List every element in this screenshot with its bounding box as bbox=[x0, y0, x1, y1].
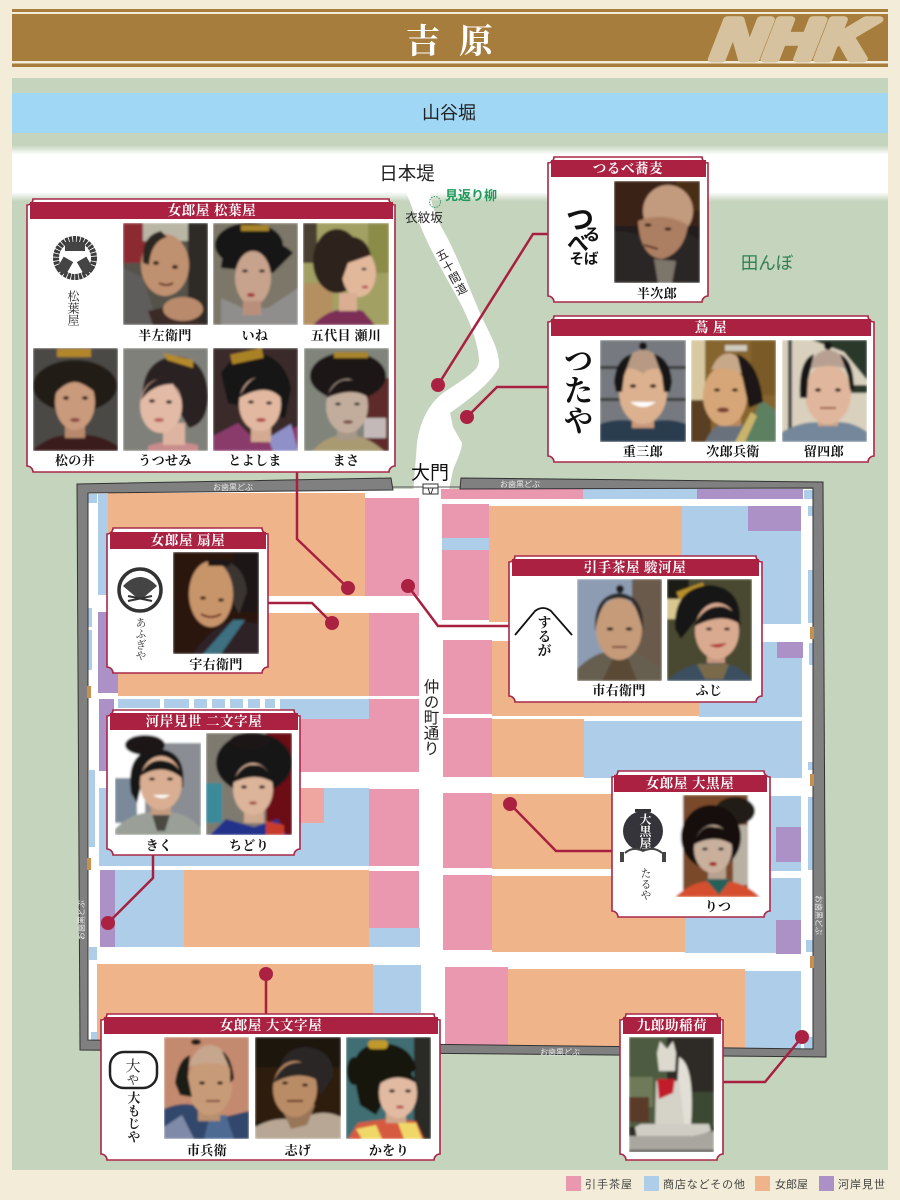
road label: 仲の町通り: 仲の町通り bbox=[422, 678, 439, 756]
panel: 大文字屋 bbox=[101, 1014, 440, 1160]
panel: 扇屋: 女郎屋 扇屋 bbox=[151, 532, 225, 548]
photo: 宇右衛門 bbox=[173, 552, 259, 654]
connector lines bbox=[101, 234, 809, 1082]
name: 留四郎: 留四郎 bbox=[804, 444, 844, 459]
photo: 半左衛門 bbox=[123, 223, 208, 325]
photo: りつ bbox=[675, 795, 760, 897]
photo: 半次郎 bbox=[614, 181, 700, 283]
panel: 大黒屋: 女郎屋 大黒屋 bbox=[646, 775, 734, 791]
panel: 松葉屋 bbox=[27, 199, 395, 472]
main gate: 大門: 大門 bbox=[411, 462, 449, 484]
map labels: 日本堤 bbox=[379, 163, 435, 184]
legend: 商店などその他 bbox=[663, 1178, 745, 1191]
photo: 志げ bbox=[255, 1037, 341, 1139]
icon: つるべそば logo: べ bbox=[567, 231, 589, 256]
photo: ふじ bbox=[667, 579, 752, 681]
map labels bbox=[379, 163, 794, 299]
icon: 扇屋 crest: あふぎや bbox=[134, 617, 146, 661]
icon: つるべそば logo: そば bbox=[570, 251, 599, 268]
photo: 重三郎 bbox=[600, 340, 686, 442]
name: りつ: りつ bbox=[705, 899, 731, 914]
moat wall: お歯黒どぶ: お歯黒どぶ bbox=[213, 482, 253, 492]
title band bbox=[12, 8, 888, 72]
photo: 五代目 瀬川 bbox=[303, 223, 389, 325]
name: 半次郎: 半次郎 bbox=[637, 286, 677, 301]
panel: 蔦屋 bbox=[548, 316, 874, 462]
panel: 大文字屋: 女郎屋 大文字屋 bbox=[220, 1017, 322, 1033]
panel: 二文字屋 bbox=[107, 710, 300, 855]
name: まさ: まさ bbox=[333, 453, 359, 468]
moat wall: お歯黒どぶ bbox=[76, 478, 826, 1057]
icon: つるべそば logo: つ bbox=[566, 204, 594, 235]
panel: 駿河屋 bbox=[509, 556, 762, 702]
photo: うつせみ bbox=[123, 348, 208, 451]
photo: 留四郎 bbox=[782, 340, 867, 442]
photo: とよしま bbox=[213, 348, 298, 451]
moat wall: お歯黒どぶ: お歯黒どぶ bbox=[540, 1047, 580, 1057]
photo: いね bbox=[213, 223, 298, 325]
panel: 大黒屋 bbox=[612, 771, 770, 917]
photo: かをり bbox=[346, 1037, 431, 1139]
name: 宇右衛門: 宇右衛門 bbox=[189, 657, 243, 672]
photo: 次郎兵衛 bbox=[691, 340, 776, 442]
legend: 河岸見世 bbox=[838, 1178, 885, 1191]
icon: 大文字屋 crest: や bbox=[127, 1073, 139, 1087]
moat wall: お歯黒どぶ: お歯黒どぶ bbox=[76, 900, 86, 940]
icon: 大文字屋 crest: 大もじや bbox=[126, 1090, 140, 1143]
panel: 駿河屋: 引手茶屋 駿河屋 bbox=[584, 559, 686, 575]
name: 志げ: 志げ bbox=[285, 1143, 311, 1158]
panel: 九郎助稲荷: 九郎助稲荷 bbox=[637, 1017, 707, 1033]
photo: まさ bbox=[304, 348, 389, 451]
name: 半左衛門: 半左衛門 bbox=[138, 328, 192, 343]
name: うつせみ: うつせみ bbox=[138, 453, 192, 468]
photo: ちどり bbox=[206, 733, 292, 835]
name: 次郎兵衛: 次郎兵衛 bbox=[706, 444, 760, 459]
photo: 市兵衛 bbox=[164, 1037, 249, 1139]
district interior bbox=[88, 489, 813, 1049]
name: かをり: かをり bbox=[369, 1143, 409, 1158]
moat: 山谷堀 bbox=[12, 93, 888, 133]
icon: 松葉屋 crest: 松葉屋 bbox=[66, 289, 80, 326]
panel: 二文字屋: 河岸見世 二文字屋 bbox=[146, 713, 262, 729]
panel: 蔦屋: 蔦 屋 bbox=[695, 320, 727, 335]
name: いね: いね bbox=[242, 328, 268, 343]
photo: 松の井 bbox=[33, 348, 118, 451]
map labels: 見返り柳 bbox=[445, 188, 497, 203]
title band: 吉 bbox=[406, 23, 440, 61]
panel: つるべ蕎麦 bbox=[548, 157, 708, 302]
icon: 大文字屋 crest bbox=[110, 1052, 157, 1143]
panel: 扇屋 bbox=[107, 528, 268, 673]
name: とよしま: とよしま bbox=[228, 453, 282, 468]
name: 重三郎: 重三郎 bbox=[623, 444, 663, 459]
icon: 松葉屋 crest bbox=[56, 239, 94, 326]
panel: 九郎助稲荷 bbox=[620, 1014, 723, 1160]
map labels: 五十間道 bbox=[433, 247, 470, 299]
icon: 駿河屋 logo: するが bbox=[536, 615, 552, 657]
name: 五代目 瀬川: 五代目 瀬川 bbox=[311, 328, 381, 343]
icon: 扇屋 crest bbox=[119, 569, 161, 661]
moat wall: お歯黒どぶ: お歯黒どぶ bbox=[500, 479, 540, 489]
legend bbox=[566, 1176, 885, 1191]
map labels: 衣紋坂 bbox=[405, 210, 443, 225]
icon: 大黒屋 crest: 大黒屋 bbox=[638, 812, 652, 849]
moat: 山谷堀: 山谷堀 bbox=[422, 103, 476, 123]
photo: きく bbox=[115, 734, 201, 835]
road: 五十間道 bbox=[404, 188, 499, 495]
panel: 松葉屋: 女郎屋 松葉屋 bbox=[168, 202, 256, 219]
icon: 駿河屋 logo bbox=[515, 608, 572, 657]
icon: 蔦屋 logo: つたや bbox=[558, 345, 592, 435]
main gate: 大門 bbox=[411, 462, 449, 494]
photo: 狐像 bbox=[629, 1037, 714, 1152]
name: ちどり: ちどり bbox=[229, 838, 269, 853]
legend: 引手茶屋 bbox=[585, 1177, 632, 1191]
town blocks bbox=[87, 489, 813, 1049]
name: 市兵衛: 市兵衛 bbox=[187, 1143, 227, 1158]
panel: つるべ蕎麦: つるべ蕎麦 bbox=[593, 160, 663, 176]
name: ふじ: ふじ bbox=[696, 683, 722, 698]
map labels: 田んぼ bbox=[741, 253, 794, 273]
icon: 大文字屋 crest: 大 bbox=[125, 1058, 141, 1075]
icon: 大黒屋 crest bbox=[620, 809, 666, 900]
photo: 市右衛門 bbox=[577, 579, 662, 681]
side gates bbox=[87, 627, 814, 968]
icon: 大黒屋 crest: たるや bbox=[639, 867, 652, 900]
icon: つるべそば logo bbox=[566, 204, 600, 268]
legend: 女郎屋 bbox=[775, 1178, 808, 1191]
title band: 原 bbox=[459, 23, 495, 61]
name: きく: きく bbox=[146, 838, 172, 853]
name: 市右衛門: 市右衛門 bbox=[592, 683, 646, 698]
title band: NHK bbox=[709, 8, 881, 72]
moat wall: お歯黒どぶ: お歯黒どぶ bbox=[814, 895, 824, 935]
name: 松の井: 松の井 bbox=[55, 453, 95, 469]
icon: つるべそば logo: る bbox=[584, 227, 600, 244]
